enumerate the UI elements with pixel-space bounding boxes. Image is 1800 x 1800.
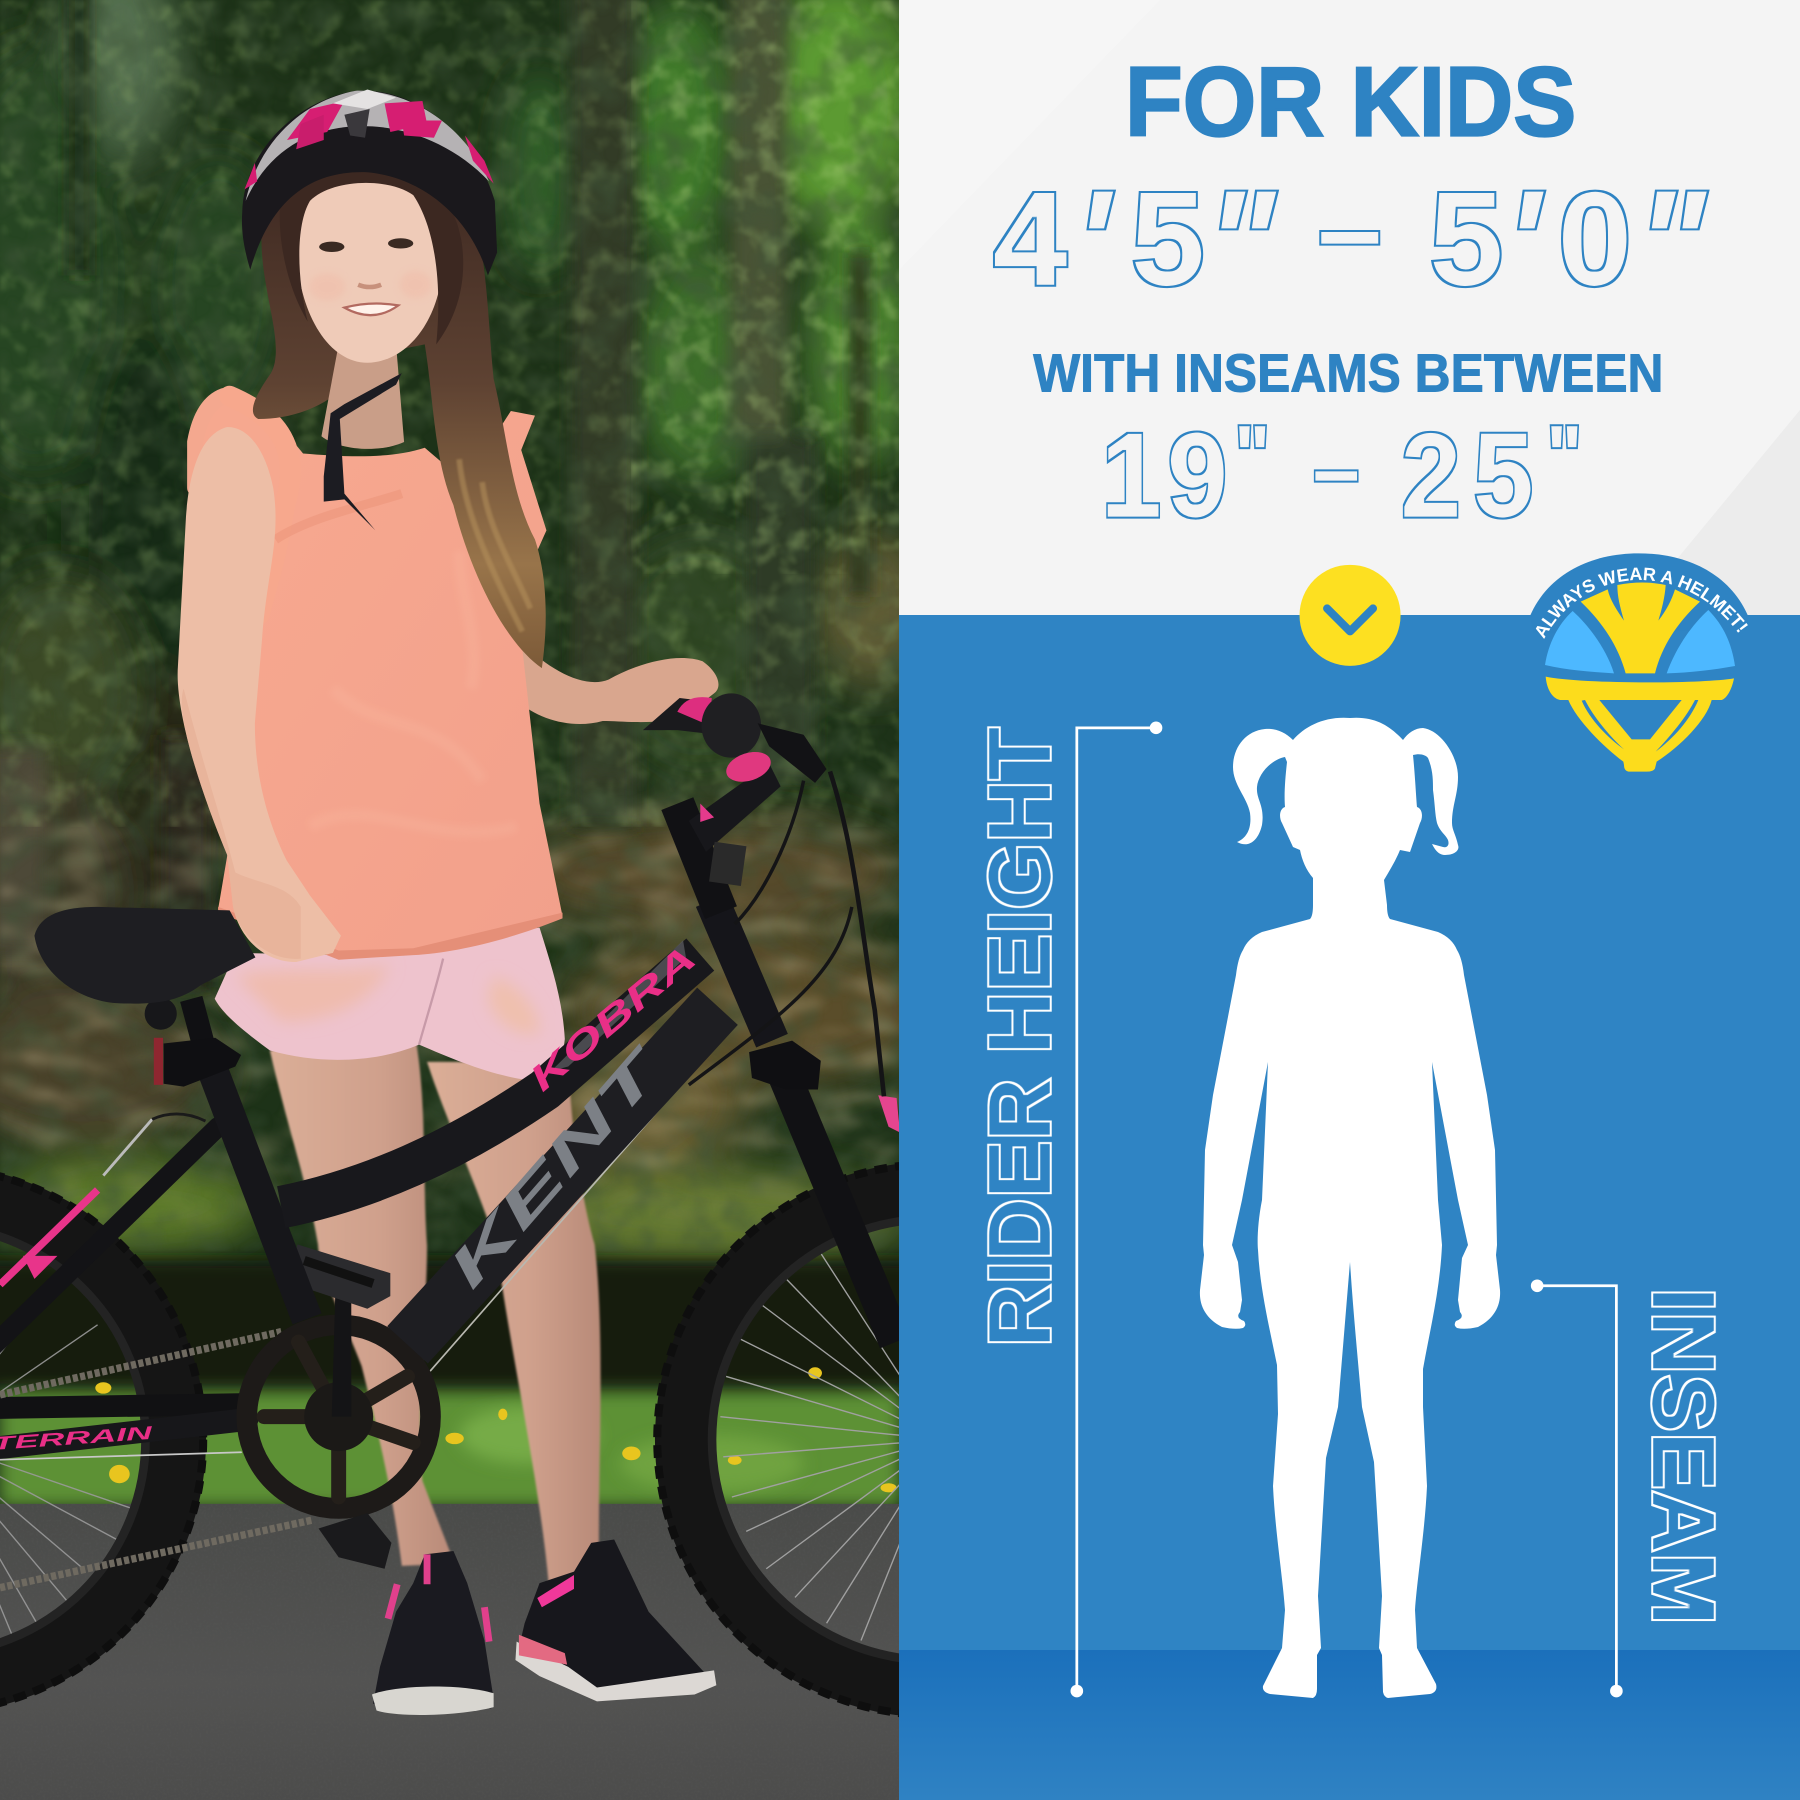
floor band	[899, 1650, 1800, 1800]
heading: for kids: FOR KIDS	[1125, 46, 1576, 156]
grass strip with yellow flowers	[0, 1367, 900, 1506]
rider height range: '	[1505, 161, 1544, 325]
inseam range: 2	[1401, 409, 1461, 543]
helmet strap	[324, 373, 402, 530]
inseam range: 1	[1101, 409, 1161, 543]
rider height range: '	[1075, 161, 1114, 325]
chainstay and seat stay	[0, 1095, 672, 1460]
rider height range: "	[1636, 161, 1708, 325]
frame lettering KENT: KENT	[436, 1036, 676, 1299]
subheading: with inseams between: WITH INSEAMS BETWEEN	[1033, 343, 1663, 403]
panel: light top section	[899, 0, 1800, 616]
bicycle frame and drivetrain	[0, 900, 900, 1588]
handlebar, grip and brake cables	[643, 693, 884, 1096]
rider height range: 0	[1558, 165, 1632, 314]
rider silhouette	[1200, 718, 1500, 1698]
photo background: forest, grass and path	[0, 0, 930, 1800]
fork crown	[749, 1041, 821, 1089]
rider height range: 4	[993, 165, 1067, 314]
panel: blue rider diagram section	[899, 615, 1800, 1800]
label: rider height: RIDER HEIGHT	[970, 727, 1069, 1347]
girl's raised arm and hand	[522, 650, 718, 724]
rear wheel	[0, 1168, 203, 1712]
inseam range: "	[1235, 409, 1270, 501]
frame lettering KOBRA: KOBRA	[522, 937, 704, 1099]
girl's shoes	[372, 1539, 716, 1715]
girl's legs	[270, 1039, 601, 1584]
girl's shirt	[193, 394, 563, 960]
inseam range: –	[1313, 417, 1359, 521]
inseam range: "	[1547, 409, 1582, 501]
label: inseam: INSEAM	[1634, 1287, 1733, 1625]
icon: always wear a helmet badge	[1530, 553, 1748, 772]
cranks and pedals	[290, 1244, 391, 1569]
inseam range: 5	[1473, 409, 1533, 543]
rider height measuring line	[1071, 722, 1162, 1697]
front wheel	[653, 1162, 899, 1718]
tubes	[214, 900, 895, 1345]
icon: always wear a helmet badge: ALWAYS WEAR A HELMET!	[1536, 568, 1748, 639]
rider height range: 5	[1429, 165, 1503, 314]
bicycle helmet	[242, 90, 497, 276]
girl's arm and hand resting on saddle	[178, 427, 341, 962]
girl's shorts	[215, 928, 565, 1081]
yellow circle with chevron	[1300, 565, 1401, 666]
girl's head and long hair	[253, 149, 546, 668]
rider height range: –	[1318, 166, 1382, 294]
rider height range: 5	[1131, 165, 1205, 314]
asphalt path	[0, 1504, 900, 1800]
rider height range: "	[1205, 161, 1277, 325]
inseam measuring line	[1531, 1279, 1623, 1697]
saddle	[34, 907, 255, 1004]
rear brake parts	[0, 1114, 205, 1285]
inseam range: 9	[1168, 409, 1227, 543]
panel: photo of girl with bicycle	[0, 0, 899, 1800]
front brake and cable details	[878, 1095, 900, 1133]
chainring	[247, 1325, 430, 1508]
face features	[318, 238, 422, 316]
chain	[0, 1332, 313, 1588]
seat post and reflector	[145, 996, 241, 1087]
